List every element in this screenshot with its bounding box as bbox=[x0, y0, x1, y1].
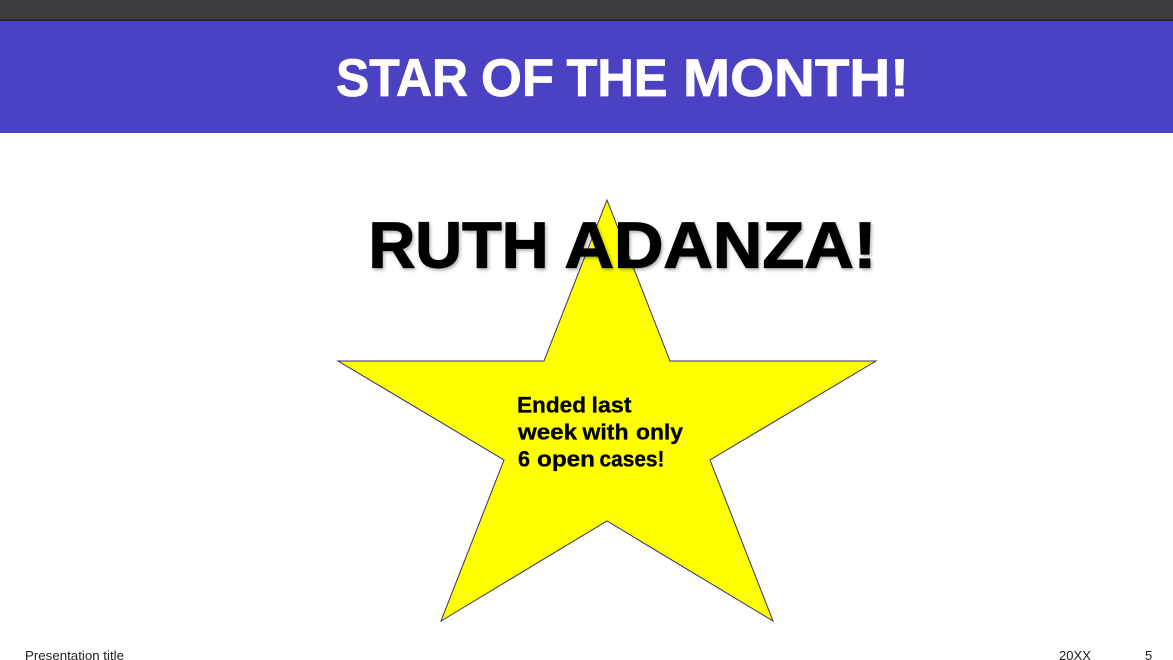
name heading: ADANZA! bbox=[564, 208, 876, 282]
top toolbar bar bbox=[0, 0, 1173, 20]
name heading bbox=[368, 208, 876, 282]
header banner bbox=[0, 21, 1173, 133]
star caption: Ended bbox=[517, 392, 586, 418]
star caption: only bbox=[636, 420, 684, 444]
title: STAR bbox=[336, 49, 468, 108]
star caption: open bbox=[537, 446, 595, 472]
star caption: with bbox=[581, 420, 628, 444]
icon: yellow star bbox=[338, 200, 876, 621]
title: MONTH! bbox=[683, 49, 909, 108]
title: THE bbox=[566, 49, 668, 108]
title bbox=[336, 49, 909, 108]
title: OF bbox=[481, 49, 554, 108]
star caption: 6 bbox=[518, 446, 530, 472]
star caption: last bbox=[592, 392, 632, 418]
star caption bbox=[517, 392, 684, 472]
star caption: week bbox=[517, 420, 578, 444]
name heading: RUTH bbox=[368, 208, 548, 282]
star caption: cases! bbox=[600, 446, 664, 472]
